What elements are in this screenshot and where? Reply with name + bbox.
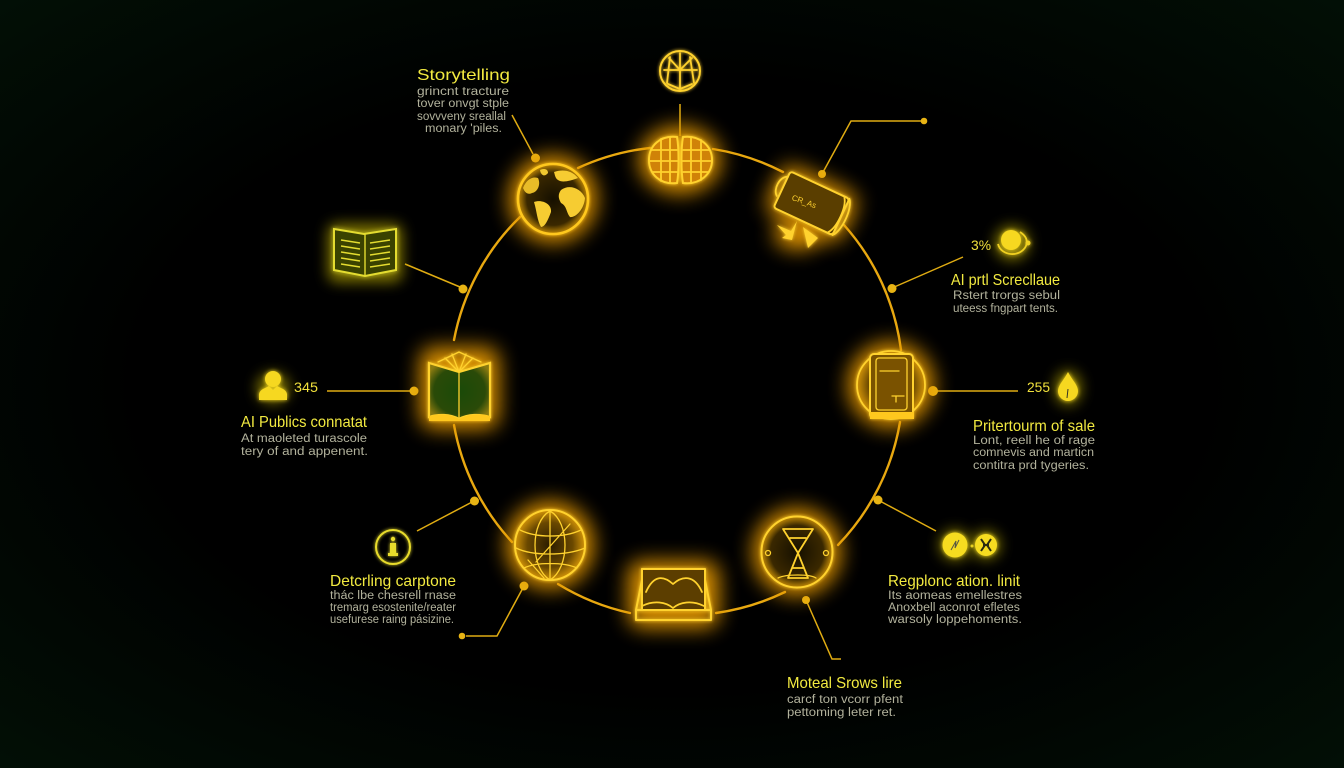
connector: left book (327, 386, 418, 396)
text: storytelling: Storytelling (417, 67, 510, 84)
connector: lower right (874, 496, 936, 531)
text: pritertourm: Pritertourm of sale (973, 418, 1095, 435)
icon: hourglass circle (753, 508, 841, 596)
text: regplonc: Its aomeas emellestres (888, 590, 1022, 602)
text: pritertourm: comnevis and marticn (973, 447, 1094, 459)
text: ai publics: tery of and appenent. (241, 446, 368, 458)
text: pritertourm: contitra prd tygeries. (973, 460, 1089, 472)
text: detcrling: tremarg esostenite/reater (330, 602, 456, 614)
icon: drop (1055, 371, 1081, 405)
icon: moon circle (995, 226, 1030, 260)
text: pritertourm (973, 380, 1095, 472)
text: detcrling: usefurese raing pásizine. (330, 614, 454, 626)
text: ai prtl: uteess fngpart tents. (953, 303, 1058, 315)
text: regplonc (887, 573, 1022, 626)
text: ai publics (241, 380, 368, 458)
icon: phone in circle (848, 342, 934, 428)
text: storytelling: grincnt tracture (417, 86, 509, 98)
ring of arc segments (454, 148, 901, 613)
connector: storytelling (512, 115, 540, 162)
connector: hourglass down (802, 596, 841, 659)
text: detcrling (330, 573, 456, 626)
icon: paired circles (940, 530, 1000, 560)
text: ai prtl: AI prtl Screcllaue (951, 272, 1060, 289)
text: storytelling: monary 'piles. (425, 123, 502, 135)
icon: top small globe (660, 51, 700, 91)
connector: phone (928, 386, 1018, 396)
text: detcrling: thác lbe chesrell rnase (330, 590, 456, 602)
connector: top globe (679, 104, 681, 136)
text: detcrling: Detcrling carptone (330, 573, 456, 590)
text: ai prtl (951, 238, 1060, 315)
text: regplonc: Regplonc ation. linit (888, 573, 1021, 590)
icon: upper-left open book (328, 224, 402, 282)
icon: world globe (509, 155, 597, 243)
connector: battery (818, 118, 927, 178)
icon: lower wire globe (506, 501, 594, 589)
text: pritertourm: Lont, reell he of rage (973, 435, 1095, 447)
connector: lower globe (459, 582, 528, 639)
text: moteal: pettoming leter ret. (787, 707, 896, 719)
icon: brain globe (639, 126, 721, 194)
connector: info (417, 496, 479, 531)
text: storytelling: tover onvgt stple (417, 98, 509, 110)
icon: battery scroll (762, 161, 861, 250)
icon: left open book (420, 347, 499, 429)
connector: right upper (888, 257, 963, 293)
icon: bottom book (628, 561, 719, 628)
icon: info (376, 530, 410, 564)
text: moteal: Moteal Srows lire (787, 675, 902, 692)
text: moteal (787, 675, 904, 719)
text: ai publics: AI Publics connatat (241, 414, 368, 431)
icon: battery scroll: CR_As (791, 193, 817, 210)
text: moteal: carcf ton vcorr pfent (787, 694, 904, 706)
text: ai publics: At maoleted turascole (241, 433, 367, 445)
text: ai prtl: Rstert trorgs sebul (953, 290, 1060, 302)
connector: upper-left book (405, 264, 468, 294)
text: ai publics: 345 (294, 380, 318, 395)
text: regplonc: Anoxbell aconrot efletes (888, 602, 1020, 614)
text: ai prtl: 3% (971, 238, 991, 253)
text: storytelling: sovvveny sreallal (417, 111, 506, 123)
text: storytelling (417, 67, 510, 135)
text: regplonc: warsoly loppehoments. (887, 614, 1022, 626)
icon: person (257, 371, 289, 403)
text: pritertourm: 255 (1027, 380, 1050, 395)
